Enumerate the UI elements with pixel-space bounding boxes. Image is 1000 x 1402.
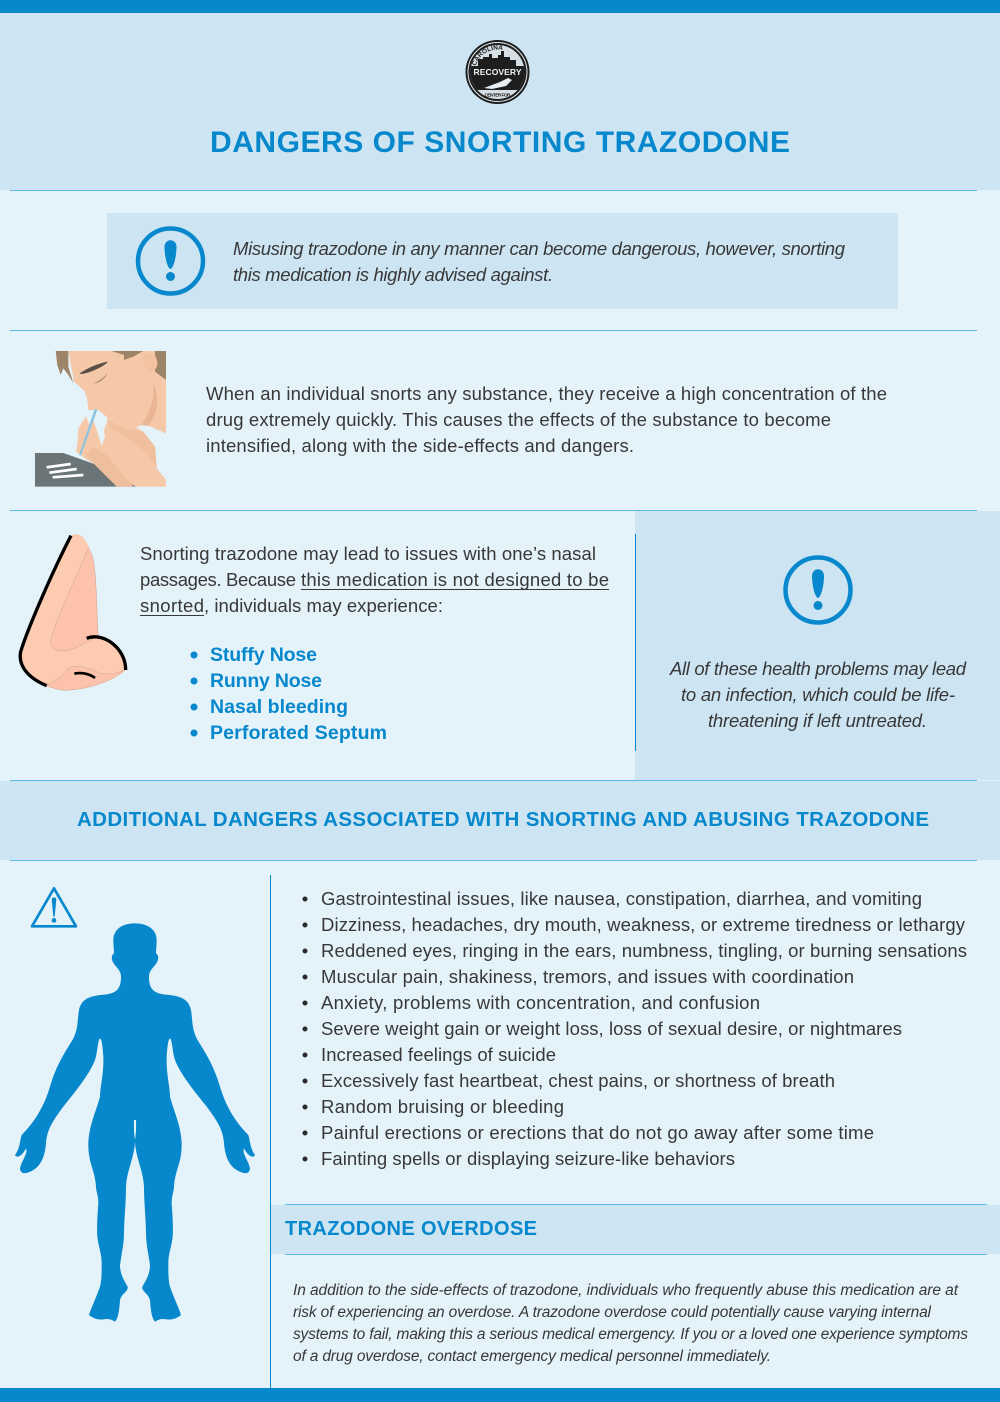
list: additional dangers: Fainting spells or displaying seizure-like behaviors xyxy=(321,1148,735,1169)
list: additional dangers: Gastrointestinal issues, like nausea, constipation, diarrhea, and vomiting xyxy=(321,888,922,909)
list: nasal symptoms: Stuffy Nose xyxy=(210,644,317,666)
text: overdose paragraph: risk of experiencing an overdose. A trazodone overdose could potentially cause varying internal xyxy=(293,1304,932,1321)
title: DANGERS OF SNORTING TRAZODONE xyxy=(210,126,790,159)
note text xyxy=(669,658,967,731)
list: nasal symptoms: Runny Nose xyxy=(210,670,322,692)
list: additional dangers: Muscular pain, shakiness, tremors, and issues with coordination xyxy=(321,966,854,987)
list: additional dangers: Severe weight gain or weight loss, loss of sexual desire, or nightmares xyxy=(321,1018,902,1039)
text: nasal issues xyxy=(140,543,609,616)
callout text: this medication is highly advised against. xyxy=(233,264,553,285)
list: additional dangers: Reddened eyes, ringing in the ears, numbness, tingling, or burning sensations xyxy=(321,940,967,961)
text: overdose paragraph: systems to fail, making this a serious medical emergency. If you or a loved one experience symptoms xyxy=(293,1326,968,1343)
note text: threatening if left untreated. xyxy=(708,710,927,731)
list: additional dangers: Increased feelings of suicide xyxy=(321,1044,556,1065)
text: nasal issues: Snorting trazodone may lead to issues with one’s nasal xyxy=(140,543,596,564)
text: overdose paragraph: In addition to the side-effects of trazodone, individuals who frequently abuse this medication are at xyxy=(293,1282,959,1299)
panel: warning callout xyxy=(107,213,898,309)
text: overdose paragraph: of a drug overdose, contact emergency medical personnel immediately. xyxy=(293,1348,771,1365)
icon: exclamation circle xyxy=(138,228,203,294)
list: nasal symptoms xyxy=(190,644,387,744)
text: intro paragraph: drug extremely quickly. This causes the effects of the substance to become xyxy=(206,409,831,430)
list: nasal symptoms: Perforated Septum xyxy=(210,722,387,744)
bottom bar xyxy=(0,1388,1000,1402)
icon: human body silhouette xyxy=(15,923,255,1322)
icon: man snorting xyxy=(35,351,166,487)
callout text: Misusing trazodone in any manner can become dangerous, however, snorting xyxy=(233,238,846,259)
logo: CAROLINA xyxy=(472,45,502,66)
panel: overdose heading: TRAZODONE OVERDOSE xyxy=(285,1218,537,1240)
text: nasal issues: snorted xyxy=(140,595,204,616)
logo xyxy=(466,40,530,104)
note text: All of these health problems may lead xyxy=(669,658,967,679)
icon: warning triangle xyxy=(32,888,76,926)
list: additional dangers: Dizziness, headaches, dry mouth, weakness, or extreme tiredness or lethargy xyxy=(321,914,966,935)
text: nasal issues: , individuals may experience: xyxy=(204,595,443,616)
text: intro paragraph: intensified, along with the side-effects and dangers. xyxy=(206,435,634,456)
top bar xyxy=(0,0,1000,13)
panel: overdose heading xyxy=(271,1204,1000,1254)
list: additional dangers: Random bruising or bleeding xyxy=(321,1096,564,1117)
icon: exclamation circle xyxy=(786,558,850,622)
panel: additional dangers heading xyxy=(0,781,1000,860)
text: nasal issues: this medication is not designed to be xyxy=(301,569,609,590)
icon: nose xyxy=(20,534,126,690)
text: nasal issues: passages. Because xyxy=(140,569,296,590)
list: nasal symptoms: Nasal bleeding xyxy=(210,696,348,718)
text: overdose paragraph xyxy=(293,1282,968,1365)
list: additional dangers: Excessively fast heartbeat, chest pains, or shortness of breath xyxy=(321,1070,835,1091)
list: additional dangers: Anxiety, problems with concentration, and confusion xyxy=(321,992,760,1013)
panel: infection note xyxy=(635,511,1000,780)
list: additional dangers xyxy=(302,888,967,1169)
text: intro paragraph xyxy=(206,383,887,456)
callout text xyxy=(233,238,846,285)
text: intro paragraph: When an individual snorts any substance, they receive a high concentration of the xyxy=(206,383,887,404)
logo: CENTER FOR xyxy=(484,92,511,98)
panel: additional dangers heading: ADDITIONAL DANGERS ASSOCIATED WITH SNORTING AND ABUSING TRAZODONE xyxy=(77,808,929,831)
logo: RECOVERY xyxy=(474,67,522,77)
list: additional dangers: Painful erections or erections that do not go away after some time xyxy=(321,1122,874,1143)
note text: to an infection, which could be life- xyxy=(681,684,955,705)
panel: header xyxy=(0,13,1000,190)
